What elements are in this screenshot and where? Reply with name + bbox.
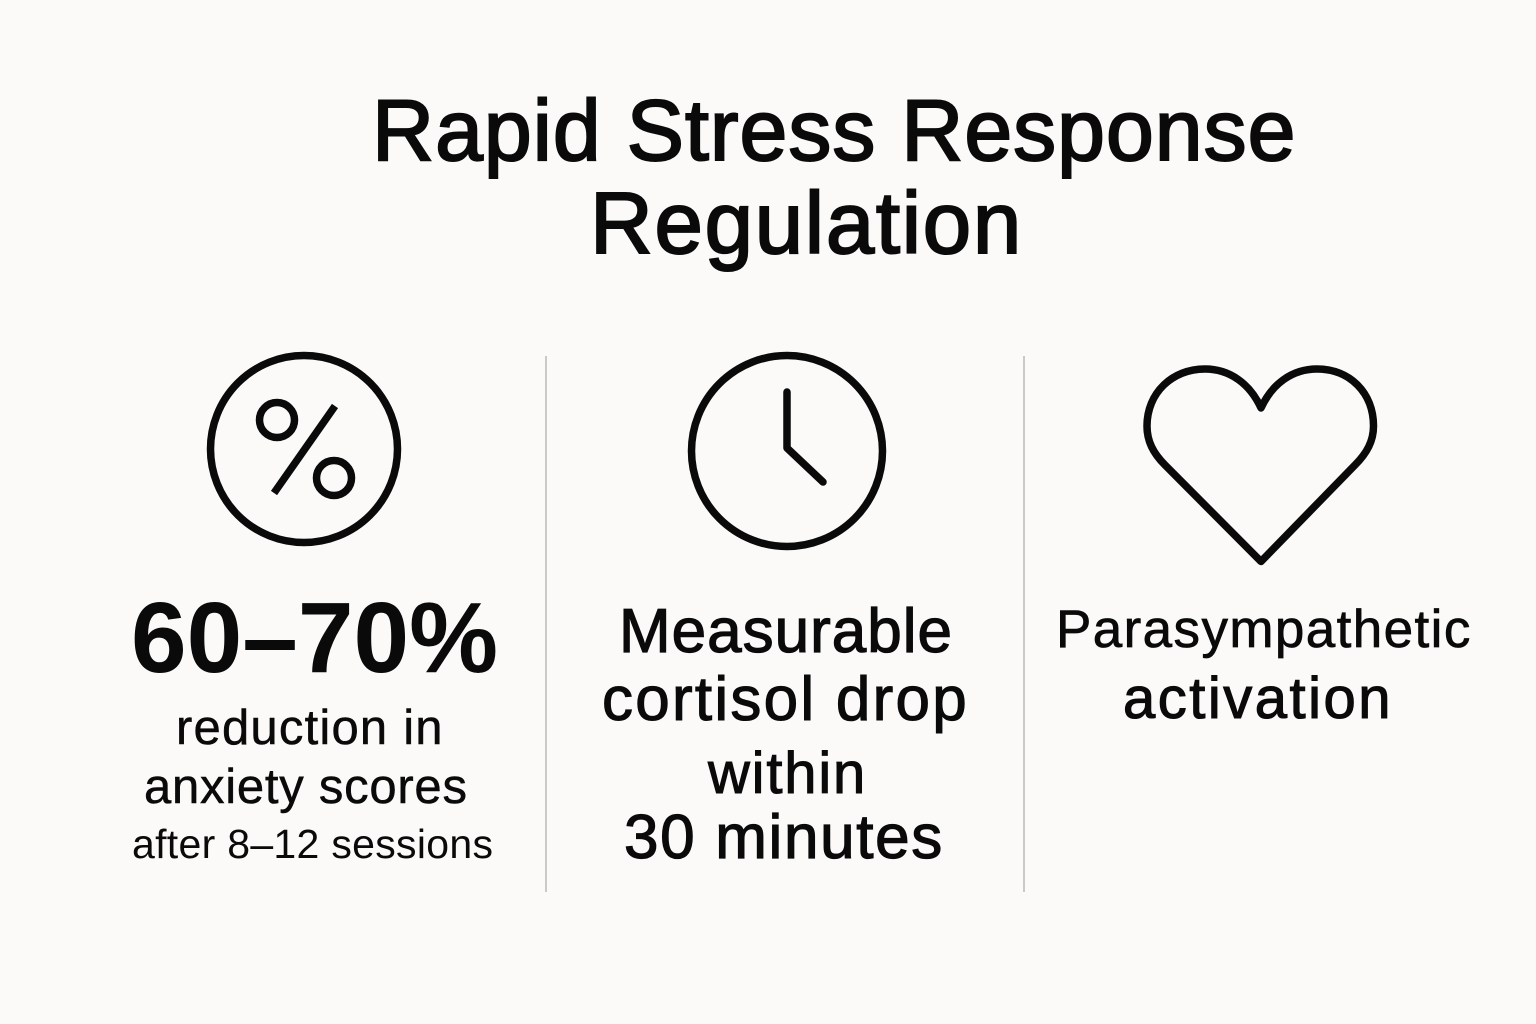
description line two: anxiety scores bbox=[144, 760, 468, 814]
description line one: reduction in bbox=[176, 700, 444, 754]
title: Regulation bbox=[590, 175, 1023, 272]
line: cortisol drop: cortisol drop bbox=[602, 664, 969, 734]
title bbox=[372, 83, 1296, 272]
icon: heart bbox=[1147, 369, 1374, 562]
line: Measurable: Measurable bbox=[619, 596, 953, 666]
big number: 60–70% bbox=[131, 582, 498, 694]
description line three: after 8–12 sessions bbox=[132, 821, 493, 867]
line: 30 minutes: 30 minutes bbox=[624, 802, 944, 872]
title: Rapid Stress Response bbox=[372, 83, 1296, 179]
stat: anxiety reduction bbox=[131, 582, 498, 867]
icon: clock bbox=[692, 356, 882, 546]
line: activation: activation bbox=[1123, 666, 1393, 731]
stat: cortisol drop bbox=[602, 596, 969, 872]
stat: parasympathetic activation bbox=[1056, 600, 1472, 731]
line: within: within bbox=[708, 740, 867, 806]
icon: percent bbox=[210, 356, 398, 542]
line: Parasympathetic: Parasympathetic bbox=[1056, 600, 1472, 659]
